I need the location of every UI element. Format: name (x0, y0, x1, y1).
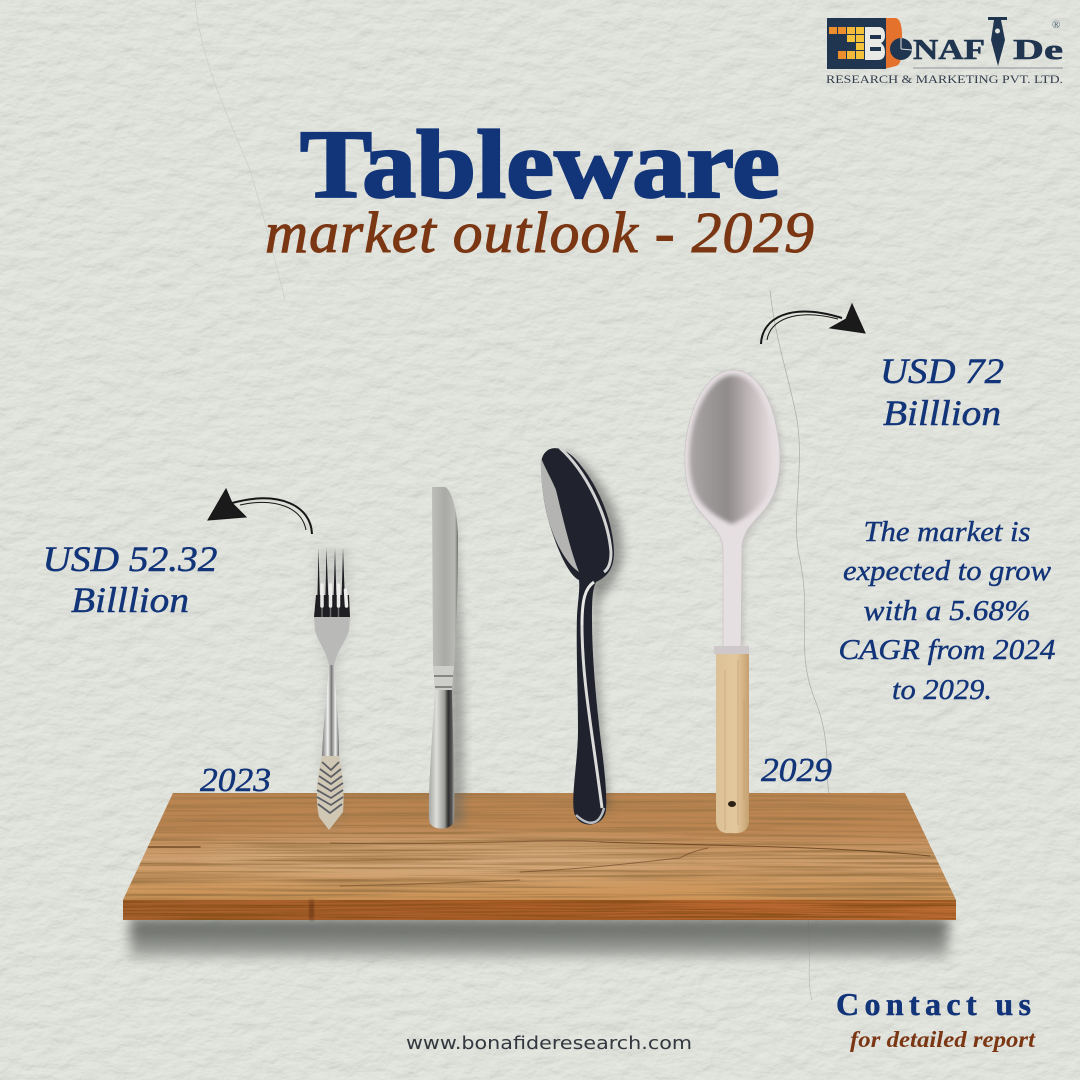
wooden shelf (120, 793, 960, 920)
year label: 2029: 2029 (761, 752, 832, 789)
arrow: curved arrow to USD 52.32 label (208, 489, 312, 534)
engraved handle tip (317, 756, 344, 830)
text block: CAGR statement: The market is (864, 517, 1031, 548)
title: Tableware (300, 111, 780, 218)
text block: CAGR statement: with a 5.68% (864, 596, 1030, 627)
fork neck and handle (314, 617, 350, 665)
logo: Bonafide Research & Marketing (826, 17, 1063, 86)
label: USD 52.32 Billion (42, 539, 218, 620)
arrow: curved arrow to USD 72 label (761, 304, 865, 344)
logo wordmark: NAF (913, 34, 985, 66)
contact subtext: for detailed report (850, 1027, 1036, 1052)
shelf shadow (130, 918, 948, 958)
label: USD 72 Billion: USD 72 (880, 351, 1004, 391)
spoon bowl and stem (685, 370, 783, 653)
year label: 2023: 2023 (200, 762, 271, 799)
black spoon (541, 448, 623, 825)
logo wordmark: ® (1052, 19, 1060, 31)
label: USD 52.32 Billion: USD 52.32 (42, 539, 218, 579)
white and wood spoon (685, 370, 783, 833)
text block: CAGR statement (838, 517, 1056, 706)
logo mark: square with grid and letter B (827, 18, 902, 69)
label: USD 72 Billion (880, 351, 1004, 433)
label: USD 52.32 Billion: Billlion (71, 580, 189, 620)
logo tagline: RESEARCH & MARKETING PVT. LTD. (826, 72, 1063, 86)
logo wordmark: De (1013, 34, 1063, 66)
fork (314, 548, 350, 830)
text block: CAGR statement: CAGR from 2024 (838, 635, 1056, 666)
wooden handle (716, 654, 749, 833)
website url: www.bonafideresearch.com (406, 1033, 692, 1054)
subtitle: market outlook - 2029 (265, 200, 815, 265)
shelf top (120, 793, 960, 900)
metal collar (714, 646, 749, 654)
label: USD 72 Billion: Billlion (883, 393, 1001, 433)
logo wordmark (890, 17, 1063, 66)
shelf front edge (123, 900, 956, 920)
text block: CAGR statement: to 2029. (892, 675, 992, 706)
fork tines (314, 548, 350, 617)
knife (429, 487, 464, 829)
contact heading: Contact us (836, 986, 1031, 1022)
text block: CAGR statement: expected to grow (843, 556, 1051, 587)
